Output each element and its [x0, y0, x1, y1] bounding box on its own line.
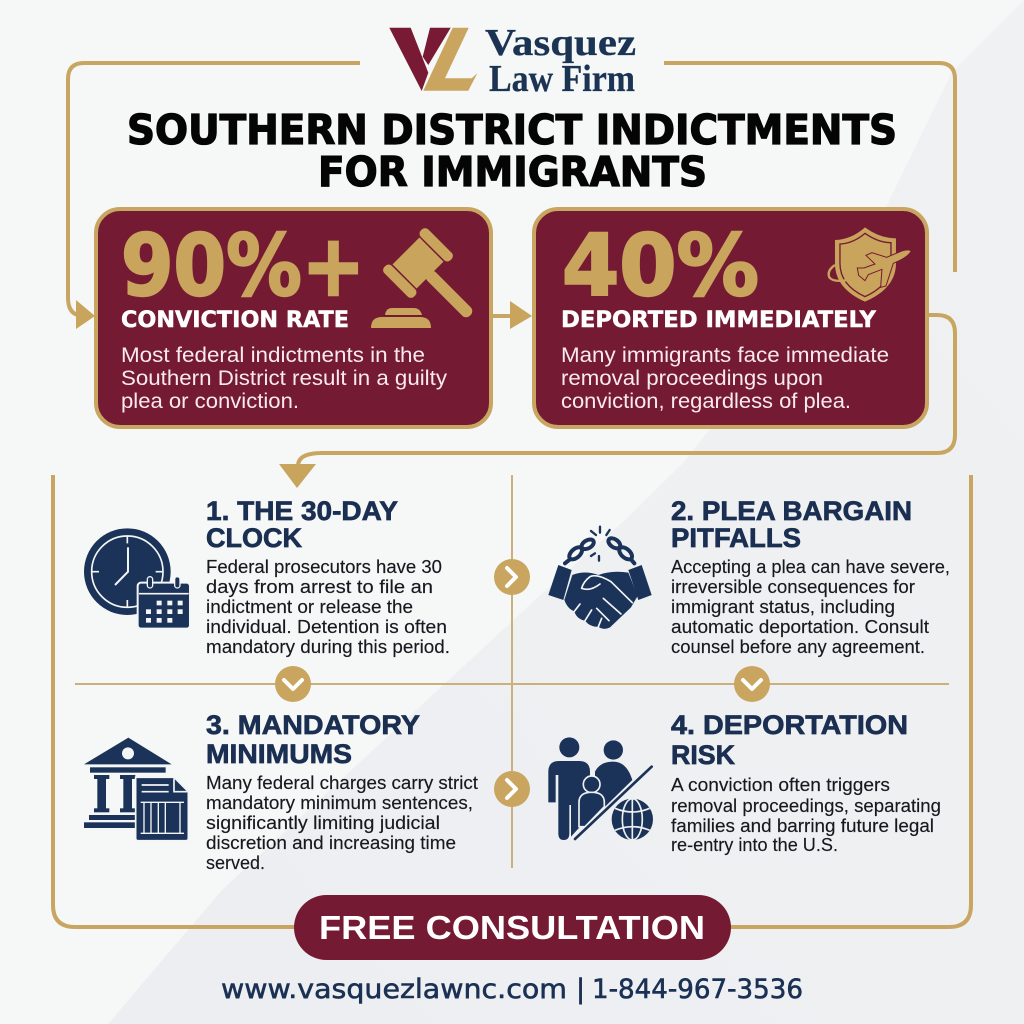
- text: step 4: re-entry into the U.S.: [671, 834, 838, 855]
- arrow: top-left flow into conviction card: [68, 63, 360, 329]
- heading: step 3: MINIMUMS: [206, 739, 352, 769]
- connector: step 3 to 4: [494, 771, 530, 807]
- heading: step 3: 3. MANDATORY: [206, 710, 420, 740]
- text: step 1: individual. Detention is often: [206, 616, 447, 637]
- icon: courthouse and document: [84, 738, 188, 841]
- heading: step 4: 4. DEPORTATION: [671, 710, 908, 740]
- label: conviction rate: CONVICTION RATE: [121, 308, 349, 333]
- icon: handshake and broken chain: [548, 527, 652, 629]
- text: step 2: counsel before any agreement.: [671, 636, 925, 657]
- text: step 1: days from arrest to file an: [206, 576, 433, 597]
- panel: step 3 mandatory minimums: [84, 710, 478, 873]
- text: step 2: [671, 556, 950, 657]
- dividers: [75, 475, 949, 868]
- panel: conviction rate: [96, 209, 492, 427]
- panel: step 1 the 30-day clock: [84, 496, 450, 657]
- arrow: between stat cards: [493, 301, 532, 329]
- heading: step 3: [206, 710, 420, 769]
- heading: step 4: [671, 710, 908, 770]
- text: step 3: Many federal charges carry strict: [206, 772, 478, 793]
- text: step 1: [206, 556, 450, 657]
- title: SOUTHERN DISTRICT INDICTMENTS: [127, 106, 897, 154]
- text: conviction description: Most federal indictments in the: [121, 343, 425, 367]
- text: deported description: Many immigrants face immediate: [561, 343, 889, 367]
- icon: gavel: [371, 226, 492, 337]
- frame: steps left and right rails: [53, 475, 971, 927]
- title: FOR IMMIGRANTS: [318, 148, 707, 196]
- text: conviction description: Southern District result in a guilty: [121, 366, 447, 390]
- text: step 1: mandatory during this period.: [206, 636, 450, 657]
- text: step 1: indictment or release the: [206, 596, 413, 617]
- panel: step 4 deportation risk: [548, 710, 941, 855]
- text: step 1: Federal prosecutors have 30: [206, 556, 442, 577]
- text: step 2: immigrant status, including: [671, 596, 895, 617]
- text: deported description: removal proceedings upon: [561, 366, 823, 390]
- heading: step 1: [206, 496, 398, 553]
- button: free consultation: [294, 895, 731, 960]
- text: step 4: A conviction often triggers: [671, 774, 890, 795]
- stat: 90%+: 90%+: [121, 217, 365, 316]
- text: conviction description: [121, 343, 447, 413]
- text: conviction description: plea or conviction.: [121, 389, 299, 413]
- footer contact: |: [576, 974, 585, 1005]
- heading: step 1: 1. THE 30-DAY: [206, 496, 398, 526]
- icon: clock and calendar: [84, 528, 190, 629]
- text: step 2: irreversible consequences for: [671, 576, 915, 597]
- heading: step 2: [671, 496, 912, 553]
- footer contact: [221, 974, 803, 1005]
- label: deported immediately: DEPORTED IMMEDIATELY: [561, 308, 877, 333]
- panel: deported immediately: [534, 209, 927, 427]
- text: step 3: discretion and increasing time: [206, 832, 456, 853]
- heading: step 2: 2. PLEA BARGAIN: [671, 496, 912, 526]
- footer contact: www.vasquezlawnc.com: [221, 974, 567, 1005]
- button: free consultation: FREE CONSULTATION: [319, 909, 705, 946]
- connector: top-right frame line: [664, 63, 955, 272]
- text: step 3: served.: [206, 852, 265, 873]
- text: step 3: [206, 772, 478, 873]
- text: step 2: Accepting a plea can have severe,: [671, 556, 950, 577]
- text: step 3: mandatory minimum sentences,: [206, 792, 473, 813]
- text: deported description: [561, 343, 889, 413]
- logo: Vasquez: [485, 22, 636, 64]
- text: step 4: families and barring future legal: [671, 815, 934, 836]
- text: step 2: automatic deportation. Consult: [671, 616, 929, 637]
- icon: family and globe: [548, 737, 653, 840]
- arrow: from deported card down to steps: [279, 315, 955, 488]
- connector: step 1 to 3: [275, 666, 311, 702]
- title: [127, 106, 897, 196]
- icon: shield and plane: [829, 227, 911, 302]
- connector: step 2 to 4: [734, 666, 770, 702]
- heading: step 4: RISK: [671, 740, 735, 770]
- panel: step 2 plea bargain pitfalls: [548, 496, 950, 657]
- footer contact: 1-844-967-3536: [592, 974, 803, 1005]
- connector: step 1 to 2: [494, 559, 530, 595]
- stat: 40%: 40%: [562, 217, 759, 316]
- text: step 4: [671, 774, 941, 855]
- text: step 3: significantly limiting judicial: [206, 812, 440, 833]
- heading: step 2: PITFALLS: [671, 523, 801, 553]
- text: step 4: removal proceedings, separating: [671, 795, 941, 816]
- logo: Law Firm: [489, 58, 635, 100]
- text: deported description: conviction, regardless of plea.: [561, 389, 851, 413]
- heading: step 1: CLOCK: [206, 523, 302, 553]
- logo: [389, 22, 636, 100]
